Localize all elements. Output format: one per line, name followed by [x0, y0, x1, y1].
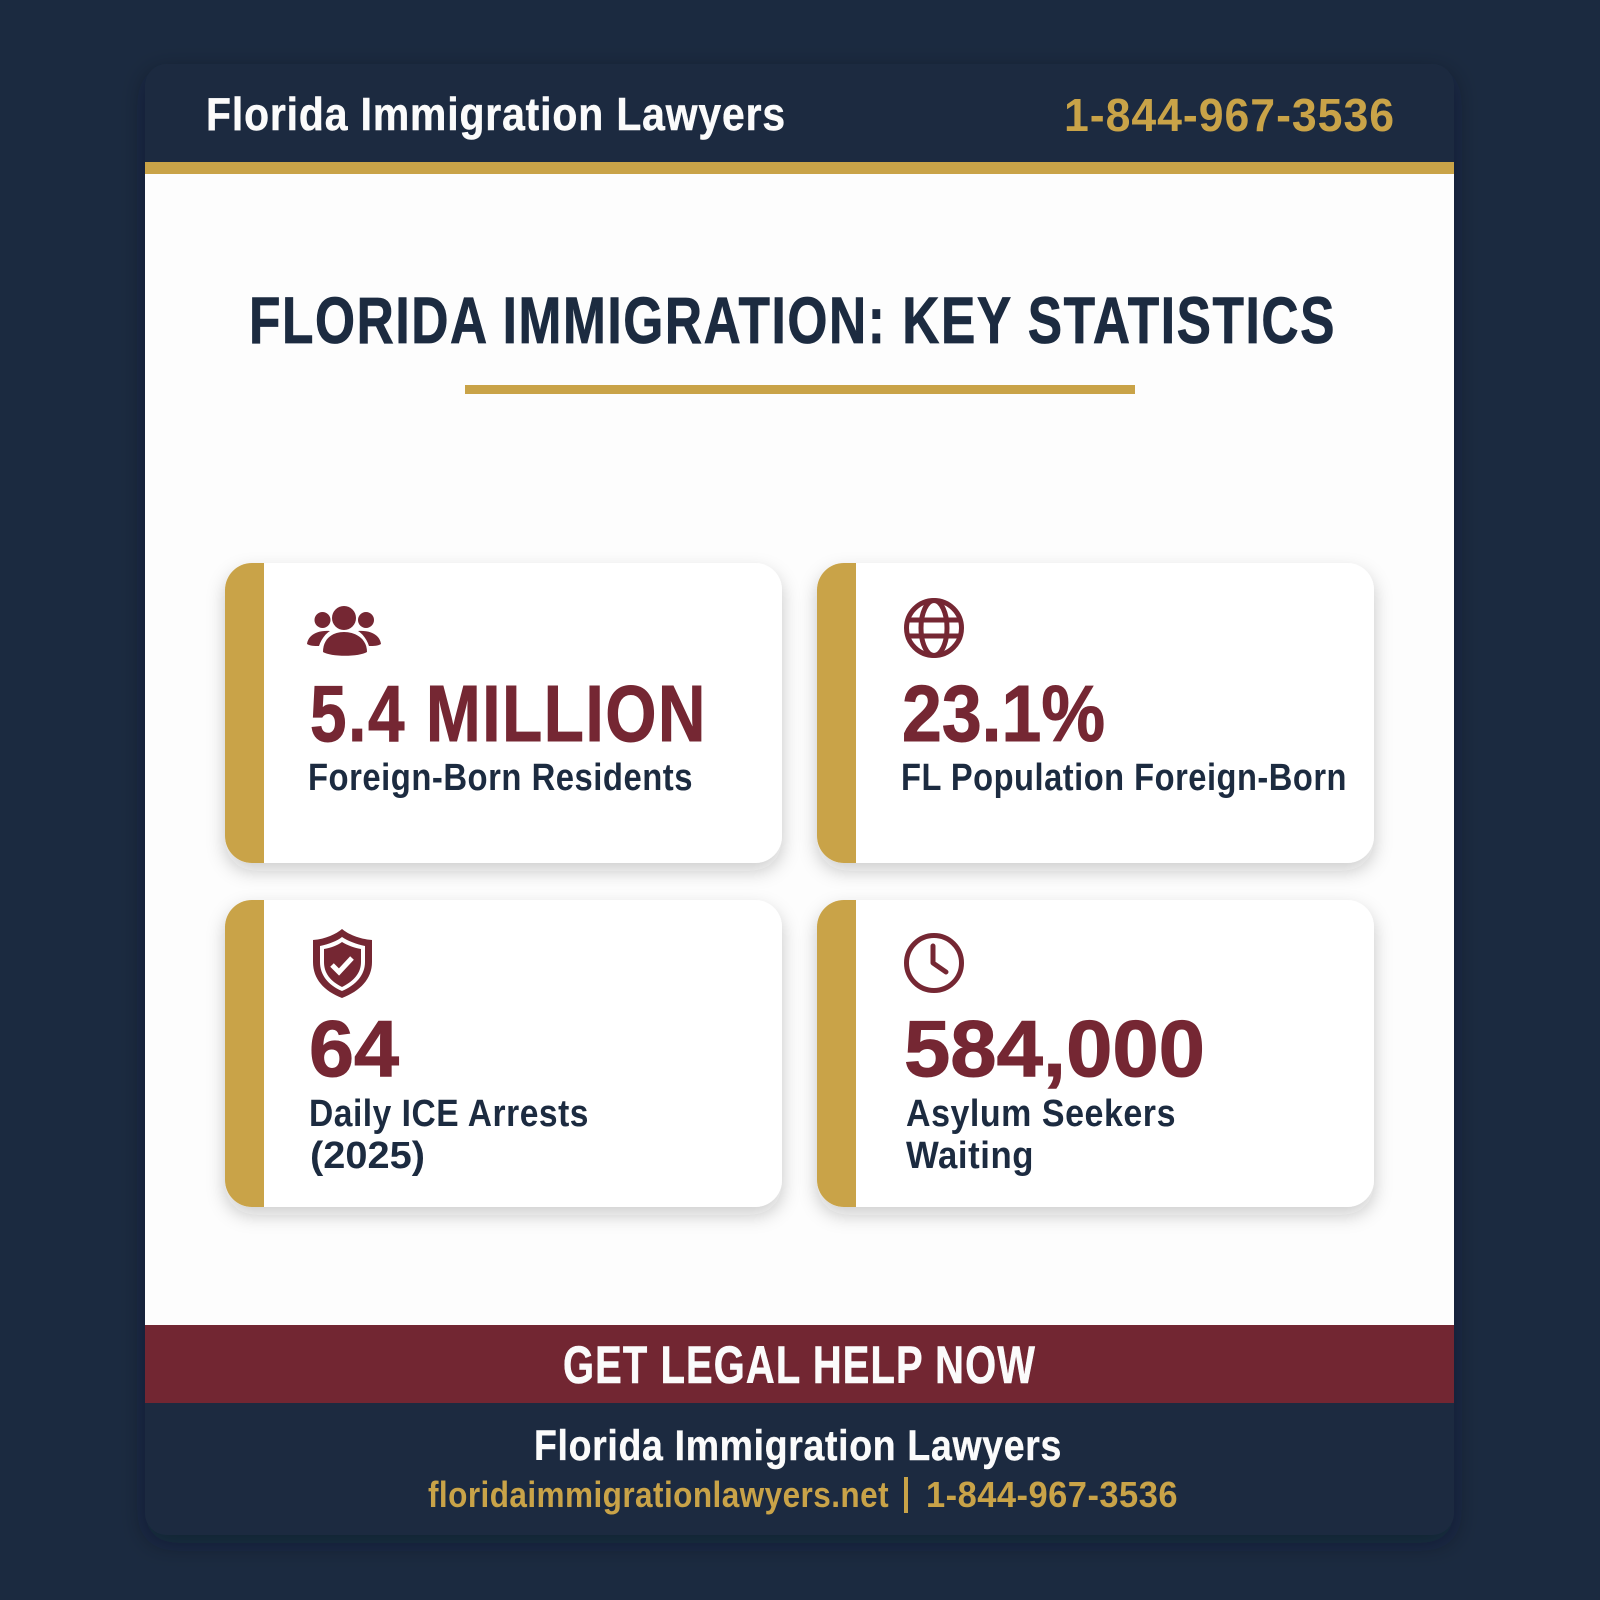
stat label second line: Waiting [906, 1135, 1034, 1177]
stat label: Foreign-Born Residents [308, 757, 693, 799]
stat label: Daily ICE Arrests [309, 1093, 589, 1135]
stat value: 23.1% [902, 669, 1105, 758]
header phone number: 1-844-967-3536 [1064, 89, 1395, 141]
panel: stat card daily arrests [225, 900, 782, 1207]
icon: clock [906, 936, 962, 990]
panel: stat card asylum seekers [817, 900, 1374, 1207]
call to action: GET LEGAL HELP NOW [563, 1336, 1036, 1395]
stat label second line: (2025) [310, 1135, 425, 1177]
panel: stat card foreign-born residents [225, 563, 782, 863]
panel: main card [145, 64, 1454, 1535]
stat label: Asylum Seekers [906, 1093, 1176, 1135]
stat value: 64 [309, 1004, 400, 1093]
stat value: 5.4 MILLION [310, 669, 707, 758]
stat label: FL Population Foreign-Born [901, 757, 1347, 799]
icon: people group [307, 606, 381, 656]
footer contact line: 1-844-967-3536 [926, 1474, 1178, 1515]
footer firm name: Florida Immigration Lawyers [534, 1422, 1062, 1470]
footer contact line: floridaimmigrationlawyers.net [428, 1474, 889, 1515]
icon: globe [906, 600, 962, 656]
stat value: 584,000 [904, 1004, 1205, 1093]
panel: stat card population share [817, 563, 1374, 863]
header firm name: Florida Immigration Lawyers [206, 88, 786, 140]
title underline [465, 385, 1135, 394]
icon: shield with check [313, 929, 372, 998]
